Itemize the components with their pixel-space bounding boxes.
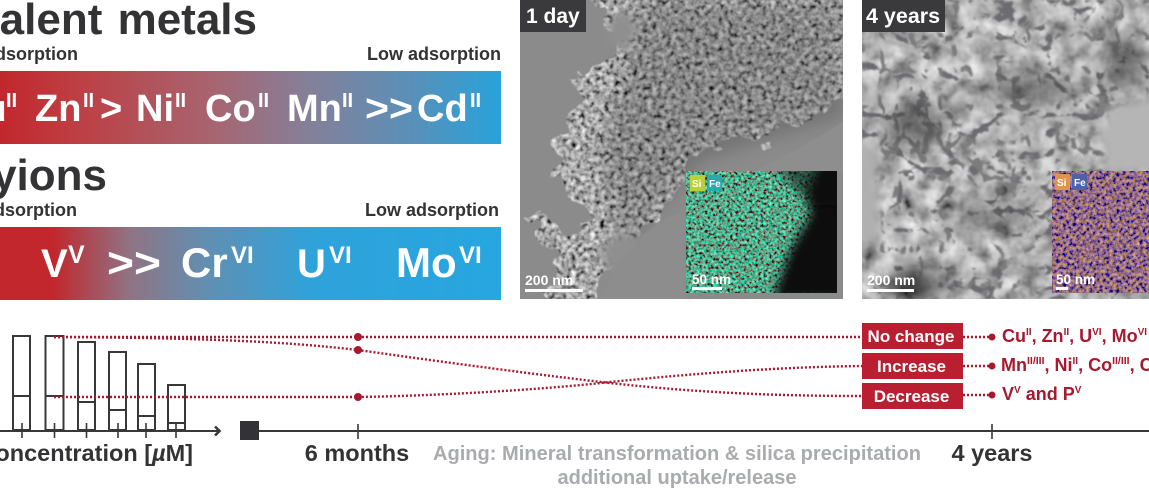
legend: Fe <box>1072 174 1087 190</box>
marker: start square <box>240 421 259 440</box>
adsorption series: divalent metals: II <box>470 90 481 112</box>
density shading over aggregate <box>600 0 843 250</box>
legend: Si <box>1055 174 1070 190</box>
adsorption series: oxyions: V <box>41 242 68 286</box>
result: no change elements: , U <box>1069 326 1092 346</box>
inset: elemental map Si Fe, 4 years: Fe <box>1074 178 1086 189</box>
adsorption series: oxyions: >> <box>107 239 161 286</box>
micrograph: 4 years <box>852 0 1149 301</box>
result: no change elements: , Zn <box>1032 326 1064 346</box>
adsorption series: divalent metals: Co <box>205 88 256 130</box>
inset: elemental map Si Fe, 4 years <box>1052 171 1149 293</box>
adsorption series: divalent metals: II <box>342 90 353 112</box>
scale: 50 nm: 50 nm <box>1056 272 1095 287</box>
caption: aging <box>433 443 921 489</box>
result: increase elements: , Co <box>1078 355 1112 375</box>
micrograph: 1 day: 1 day <box>526 5 580 28</box>
caption: aging: additional uptake/release <box>558 467 796 489</box>
legend: Fe <box>707 175 722 191</box>
result: increase elements: II/III <box>1112 355 1130 367</box>
gradient bar: divalent metals <box>0 71 501 144</box>
label: low adsorption: Low adsorption <box>367 44 501 64</box>
inset: elemental map Si Fe, 1 day <box>686 171 837 293</box>
inset: elemental map Si Fe, 1 day: Si <box>692 179 702 190</box>
time label: 1 day <box>520 0 586 32</box>
adsorption series: oxyions: Mo <box>396 239 457 286</box>
adsorption series: divalent metals: Ni <box>136 88 174 130</box>
result: increase elements: II <box>1073 356 1078 367</box>
particle aggregate texture <box>524 0 843 299</box>
result: increase elements <box>988 355 1149 375</box>
trend lines: dotted <box>54 337 992 397</box>
label: low adsorption: Low adsorption <box>365 200 499 220</box>
adsorption series: divalent metals <box>0 88 481 130</box>
box: increase <box>862 353 963 379</box>
markers: 6 months <box>354 333 362 401</box>
result: no change elements: VI <box>1092 327 1102 338</box>
gradient bar: oxyions <box>0 227 501 300</box>
result: increase elements: Mn <box>1001 355 1027 375</box>
result: decrease elements: V <box>1075 385 1082 396</box>
legend: Si <box>690 175 705 191</box>
adsorption series: divalent metals: II <box>83 90 94 112</box>
result: no change elements: II <box>1026 327 1032 338</box>
crumpled sheet texture <box>862 0 1149 299</box>
result: no change elements: , Mo <box>1102 326 1138 346</box>
adsorption series: divalent metals: Cd <box>417 88 468 130</box>
panel: oxyions adsorption <box>0 151 501 300</box>
adsorption series: oxyions: U <box>297 242 326 286</box>
adsorption series: oxyions: V <box>68 241 85 269</box>
adsorption series: oxyions: VI <box>459 242 482 269</box>
scale: 200 nm: 200 nm <box>867 272 915 288</box>
caption: aging: Aging: Mineral transformation & silica precipitation <box>433 443 921 465</box>
axis: concentration with arrow <box>0 426 220 436</box>
darker clusters <box>883 39 1147 301</box>
result: decrease elements: V <box>1014 385 1021 396</box>
result: no change elements: II <box>1064 327 1069 338</box>
scale: 50 nm: 50 nm <box>692 272 731 287</box>
scale: 200 nm: 200 nm <box>525 272 573 288</box>
inset: elemental map Si Fe, 1 day: Fe <box>709 179 721 190</box>
box: increase: Increase <box>877 357 946 376</box>
result: no change elements: VI <box>1138 327 1147 338</box>
adsorption series: divalent metals: II <box>175 90 186 112</box>
adsorption series: divalent metals: II <box>258 90 269 112</box>
time label: 6 months: 6 months <box>305 440 409 466</box>
result: no change elements: Cu <box>1002 326 1026 346</box>
chart: uptake bars by concentration <box>13 336 185 438</box>
result: increase elements: , Ni <box>1045 355 1073 375</box>
box: decrease: Decrease <box>874 387 949 406</box>
adsorption series: divalent metals: Zn <box>35 88 81 130</box>
adsorption series: oxyions: VI <box>231 242 254 269</box>
mottled sheets <box>862 0 1149 299</box>
result: no change elements <box>988 326 1147 346</box>
adsorption series: divalent metals: > <box>100 88 122 130</box>
carbon film area <box>752 122 843 172</box>
panel: divalent metals adsorption <box>0 0 501 144</box>
time label: 4 years <box>862 0 945 32</box>
holes in aggregate <box>598 6 640 272</box>
adsorption series: divalent metals: II <box>6 90 17 112</box>
micrograph: 4 years: 4 years <box>866 4 940 28</box>
box: decrease <box>862 383 963 409</box>
adsorption series: oxyions <box>41 239 482 286</box>
result: decrease elements: V <box>1002 384 1014 404</box>
box: no change: No change <box>868 327 954 346</box>
result: decrease elements <box>988 384 1082 404</box>
timeline axis <box>240 421 1149 440</box>
micrograph: 1 day <box>520 0 843 299</box>
inset: elemental map Si Fe, 4 years: Si <box>1057 178 1067 189</box>
box: no change <box>862 323 963 349</box>
time label: 4 years: 4 years <box>951 440 1033 466</box>
adsorption series: divalent metals: Mn <box>287 88 342 130</box>
lighter film areas <box>1100 95 1149 172</box>
adsorption series: oxyions: VI <box>329 242 352 269</box>
result: decrease elements: and P <box>1021 384 1075 404</box>
adsorption series: divalent metals: >> <box>365 88 413 130</box>
adsorption series: oxyions: Cr <box>181 239 228 286</box>
result: increase elements: II/III <box>1027 355 1045 367</box>
